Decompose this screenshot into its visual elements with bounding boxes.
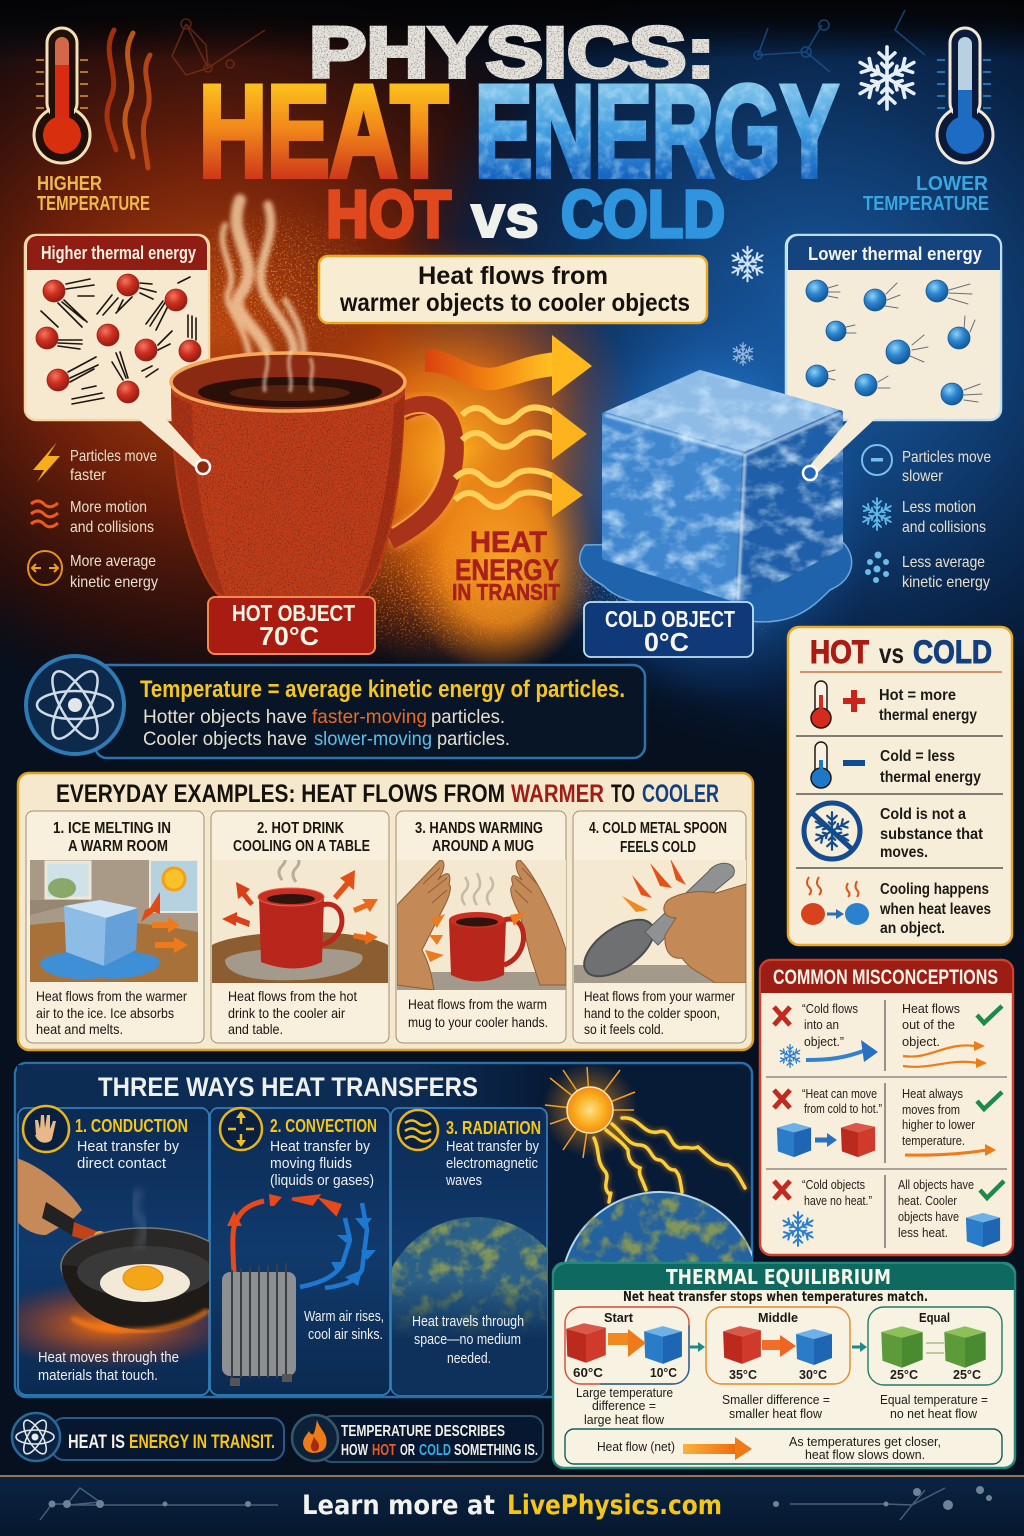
label: higher temperature: TEMPERATURE	[37, 193, 150, 215]
panel: conduction: Heat moves through the	[38, 1349, 179, 1366]
pill: temperature describes	[292, 1415, 543, 1462]
hot bullet: more kinetic energy: More average	[70, 553, 156, 570]
row: hot: thermal energy	[879, 707, 977, 724]
stage: equal	[868, 1307, 1002, 1421]
row: cold to hot: Heat always	[902, 1086, 963, 1101]
label: heat energy in transit: HEAT	[470, 526, 547, 559]
earth	[392, 1217, 547, 1395]
label: lower temperature: LOWER	[916, 173, 989, 195]
panel: temperature definition: Cooler objects have	[143, 728, 307, 750]
icon: atom	[26, 656, 124, 754]
card: metal spoon	[573, 811, 746, 1043]
pill: temperature describes: HOT	[372, 1442, 396, 1459]
panel: conduction: materials that touch.	[38, 1367, 158, 1384]
small snowflakes	[730, 247, 765, 365]
row: cooling: Cooling happens	[880, 881, 989, 898]
panel: temperature definition: particles.	[431, 706, 505, 728]
label: cold object: 0°C	[644, 627, 689, 657]
card: hot drink: and table.	[228, 1021, 283, 1037]
panel: convection: Warm air rises,	[304, 1308, 384, 1325]
pill: heat is energy in transit: HEAT IS	[68, 1432, 125, 1453]
panel: thermal equilibrium: Net heat transfer stops when temperatures match.	[623, 1290, 928, 1305]
panel: radiation: electromagnetic	[446, 1155, 538, 1172]
panel: temperature definition: faster-moving	[312, 706, 427, 728]
panel: radiation: Heat travels through	[412, 1313, 524, 1330]
footer	[0, 1476, 1024, 1536]
row: cold: thermal energy	[880, 769, 981, 786]
card: metal spoon: FEELS COLD	[620, 839, 696, 856]
label: cold object	[584, 602, 753, 657]
panel: radiation: space—no medium	[414, 1331, 521, 1348]
row: cold not a substance	[804, 803, 984, 861]
row: cold flows: into an	[804, 1017, 839, 1032]
row: cold flows: object.”	[804, 1034, 844, 1049]
icon: radiation waves	[398, 1110, 438, 1150]
title: HEAT	[199, 58, 448, 204]
cold bullet: less kinetic energy: Less average	[902, 554, 985, 571]
stage: start: 60°C	[573, 1366, 603, 1380]
heading: COOLER	[642, 780, 719, 808]
arrow: middle to equal	[852, 1342, 867, 1352]
panel: conduction: Heat transfer by	[77, 1138, 179, 1155]
row: cold flows: Heat flows	[902, 1001, 960, 1016]
stage: start	[565, 1307, 689, 1427]
panel: temperature definition	[26, 656, 645, 758]
label: hot object: 70°C	[259, 621, 319, 651]
ice cube	[580, 373, 852, 622]
title: COLD	[561, 177, 725, 252]
label: lower temperature	[863, 173, 989, 215]
pill: temperature describes: HOW	[341, 1442, 369, 1459]
cold bullet: less motion	[861, 498, 986, 536]
row: cold not a substance: substance that	[880, 826, 984, 843]
pill: temperature describes: SOMETHING IS.	[454, 1442, 538, 1459]
pill: temperature describes: OR	[400, 1442, 415, 1459]
row: cold flows: out of the	[902, 1017, 955, 1032]
card: hot drink: Heat flows from the hot	[228, 988, 357, 1004]
card: metal spoon: Heat flows from your warmer	[584, 988, 735, 1004]
card: ice melting: A WARM ROOM	[68, 838, 168, 855]
row: no heat: have no heat.”	[804, 1193, 872, 1208]
card: metal spoon: hand to the colder spoon,	[584, 1005, 720, 1021]
hot bullet: more kinetic energy	[28, 551, 158, 591]
panel: temperature definition: particles.	[437, 728, 510, 750]
row: cooling: an object.	[880, 920, 945, 937]
panel: hot vs cold summary: vs	[879, 638, 904, 669]
hot bullet: more motion: and collisions	[70, 519, 154, 536]
pill: heat is energy in transit	[12, 1413, 284, 1461]
panel: temperature definition: slower-moving	[314, 728, 432, 750]
hot bullet: particles move faster: faster	[70, 467, 107, 484]
panel: hot vs cold summary: HOT	[810, 634, 869, 670]
row: cold to hot: “Heat can move	[802, 1086, 877, 1101]
card: hands warming: 3. HANDS WARMING	[415, 820, 543, 837]
row: cold not a substance: moves.	[880, 844, 928, 861]
panel: radiation	[390, 1107, 548, 1396]
label: hot object	[208, 597, 375, 654]
panel: radiation: 3. RADIATION	[446, 1118, 541, 1138]
thermometer: hot	[34, 28, 90, 163]
row: cold	[811, 742, 981, 788]
card: hands warming: Heat flows from the warm	[408, 996, 547, 1012]
stage: middle: 35°C	[729, 1368, 757, 1382]
panel: convection: moving fluids	[270, 1155, 352, 1172]
label: heat energy in transit: IN TRANSIT	[452, 579, 560, 605]
panel: everyday examples	[18, 773, 753, 1050]
stage: start: Large temperature	[576, 1386, 673, 1400]
hot bullet: particles move faster	[33, 442, 157, 484]
card: ice melting: air to the ice. Ice absorbs	[36, 1005, 174, 1021]
cold bullet: particles move slower: slower	[902, 468, 944, 485]
stage: middle: Middle	[758, 1310, 798, 1325]
card: hot drink: 2. HOT DRINK	[257, 820, 344, 837]
stage: middle: smaller heat flow	[729, 1407, 823, 1421]
stage: equal: no net heat flow	[890, 1407, 978, 1421]
arrows: convection loop	[227, 1194, 376, 1288]
panel: conduction: direct contact	[77, 1155, 167, 1172]
hot bullet: more motion	[31, 499, 154, 536]
title: HOT	[326, 177, 451, 252]
title	[199, 14, 838, 252]
icon: convection	[220, 1108, 262, 1150]
pill: temperature describes: TEMPERATURE DESCRIBES	[341, 1423, 505, 1440]
pill: temperature describes: COLD	[419, 1442, 451, 1459]
row: cold to hot: temperature.	[902, 1133, 965, 1148]
icon: atom small	[12, 1413, 60, 1461]
footer: LivePhysics.com	[507, 1490, 722, 1521]
panel: hot vs cold summary: COLD	[913, 634, 992, 670]
panel: thermal equilibrium	[553, 1263, 1015, 1468]
panel: lower thermal energy: Lower thermal energy	[808, 244, 982, 264]
panel: common misconceptions	[760, 960, 1013, 1255]
stage: start: Start	[604, 1310, 634, 1325]
cold bullet: less motion: and collisions	[902, 519, 986, 536]
cold particles	[806, 280, 982, 405]
panel: convection: cool air sinks.	[308, 1326, 383, 1343]
label: cold object: COLD OBJECT	[605, 606, 735, 632]
stage: equal: Equal temperature =	[880, 1393, 988, 1407]
card: ice melting: heat and melts.	[36, 1021, 123, 1037]
card: metal spoon: 4. COLD METAL SPOON	[589, 820, 727, 837]
row: no heat: “Cold objects	[802, 1177, 865, 1192]
hot bullet: particles move faster: Particles move	[70, 448, 157, 465]
panel: three ways heat transfers: THREE WAYS HEAT TRANSFERS	[98, 1072, 478, 1102]
stage: equal: Equal	[919, 1310, 950, 1325]
row: cold to hot: moves from	[902, 1102, 960, 1117]
row: cooling: when heat leaves	[879, 901, 991, 918]
card: ice melting: Heat flows from the warmer	[36, 988, 187, 1004]
cold bullet: particles move slower: Particles move	[902, 449, 991, 466]
steam	[223, 200, 304, 385]
pointer: cold callout	[803, 418, 876, 480]
heat flow legend: As temperatures get closer,	[789, 1435, 941, 1449]
heat flow legend	[565, 1429, 1002, 1464]
pill: heat is energy in transit: ENERGY IN TRANSIT.	[129, 1432, 275, 1453]
title: ENERGY	[475, 58, 838, 204]
heat flow legend: heat flow slows down.	[805, 1448, 925, 1462]
stage: middle: Smaller difference =	[722, 1393, 830, 1407]
panel: convection: (liquids or gases)	[270, 1172, 374, 1189]
hot bullet: more kinetic energy: kinetic energy	[70, 574, 158, 591]
row: no heat: less heat.	[898, 1225, 948, 1240]
row: cold flows	[774, 1001, 1002, 1068]
arrow: start to middle	[690, 1342, 705, 1352]
panel: higher thermal energy	[25, 235, 209, 420]
snowflake	[856, 47, 918, 109]
panel: conduction: 1. CONDUCTION	[75, 1116, 188, 1136]
arrows: heat in transit	[425, 335, 592, 517]
label: higher temperature	[37, 173, 150, 215]
label: heat energy in transit: ENERGY	[455, 554, 559, 587]
hot mug	[171, 350, 454, 600]
icon: hand	[23, 1106, 69, 1152]
callout: heat flows	[319, 256, 707, 323]
stage: start: difference =	[592, 1399, 656, 1413]
panel: radiation: Heat transfer by	[446, 1138, 539, 1155]
card: hands warming	[396, 811, 566, 1043]
panel: convection: Heat transfer by	[270, 1138, 370, 1155]
row: hot	[811, 681, 977, 728]
pointer: hot callout	[137, 418, 210, 474]
cold bullet: less kinetic energy	[865, 552, 990, 591]
card: ice melting	[26, 811, 204, 1043]
stage: start: large heat flow	[584, 1413, 665, 1427]
card: hot drink: drink to the cooler air	[228, 1005, 345, 1021]
hot bullet: more motion: More motion	[70, 499, 147, 516]
heading: EVERYDAY EXAMPLES: HEAT FLOWS FROM	[56, 780, 505, 808]
row: cooling	[801, 877, 991, 937]
stage: equal: 25°C	[890, 1368, 918, 1382]
stage: middle	[706, 1307, 850, 1421]
row: no heat	[774, 1177, 1004, 1247]
heading: TO	[611, 780, 635, 808]
card: hot drink	[211, 811, 389, 1043]
stage: start: 10°C	[650, 1366, 677, 1380]
callout: heat flows: warmer objects to cooler objects	[339, 289, 690, 317]
row: cold to hot	[774, 1086, 1002, 1157]
panel: radiation: waves	[445, 1172, 482, 1189]
label: heat energy in transit	[452, 526, 560, 605]
mug body	[171, 385, 405, 600]
heat flow legend: Heat flow (net)	[597, 1440, 675, 1454]
row: cold not a substance: Cold is not a	[880, 806, 966, 823]
heat waves icon	[107, 30, 150, 168]
cold bullet: particles move slower	[862, 445, 991, 485]
cold bullet: less motion: Less motion	[902, 499, 976, 516]
title: PHYSICS:	[309, 14, 715, 93]
panel: convection: 2. CONVECTION	[270, 1116, 377, 1136]
icon: flame	[292, 1415, 338, 1461]
row: cold flows: object.	[902, 1034, 940, 1049]
panel: conduction	[17, 1104, 210, 1396]
panel: radiation: needed.	[447, 1350, 491, 1367]
panel: higher thermal energy: Higher thermal energy	[41, 243, 196, 263]
callout: heat flows: Heat flows from	[418, 262, 608, 290]
row: cold to hot: higher to lower	[902, 1117, 976, 1132]
panel: temperature definition: Hotter objects have	[143, 706, 307, 728]
panel: hot vs cold summary	[788, 627, 1012, 945]
footer: Learn more at	[302, 1490, 495, 1521]
card: hot drink: COOLING ON A TABLE	[233, 838, 370, 855]
panel: lower thermal energy	[786, 235, 1001, 420]
panel: thermal equilibrium: THERMAL EQUILIBRIUM	[666, 1265, 891, 1289]
row: cold to hot: from cold to hot.”	[804, 1101, 882, 1116]
background	[0, 0, 1024, 744]
card: metal spoon: so it feels cold.	[584, 1021, 664, 1037]
row: no heat: heat. Cooler	[898, 1193, 958, 1208]
card: hands warming: AROUND A MUG	[432, 838, 534, 855]
panel: temperature definition: Temperature = average kinetic energy of particles.	[140, 676, 625, 703]
label: hot object: HOT OBJECT	[232, 600, 355, 626]
row: no heat: objects have	[898, 1209, 959, 1224]
title: vs	[471, 183, 539, 250]
heading: WARMER	[511, 780, 604, 808]
thermometer: cold	[937, 28, 993, 163]
stage: middle: 30°C	[799, 1368, 827, 1382]
earth and sun	[544, 1064, 752, 1262]
icon: radiator	[222, 1263, 296, 1386]
row: no heat: All objects have	[898, 1177, 974, 1192]
cold bullet: less kinetic energy: kinetic energy	[902, 574, 990, 591]
label: lower temperature: TEMPERATURE	[863, 193, 989, 215]
card: hands warming: mug to your cooler hands.	[408, 1014, 548, 1030]
hot particles	[36, 274, 201, 404]
stage: equal: 25°C	[953, 1368, 981, 1382]
row: cold flows: “Cold flows	[802, 1001, 858, 1016]
row: cold: Cold = less	[880, 748, 955, 765]
panel: convection	[210, 1108, 390, 1395]
label: higher temperature: HIGHER	[37, 173, 102, 195]
panel: three ways heat transfers	[0, 1062, 759, 1407]
row: hot: Hot = more	[879, 687, 956, 704]
card: ice melting: 1. ICE MELTING IN	[53, 820, 171, 837]
